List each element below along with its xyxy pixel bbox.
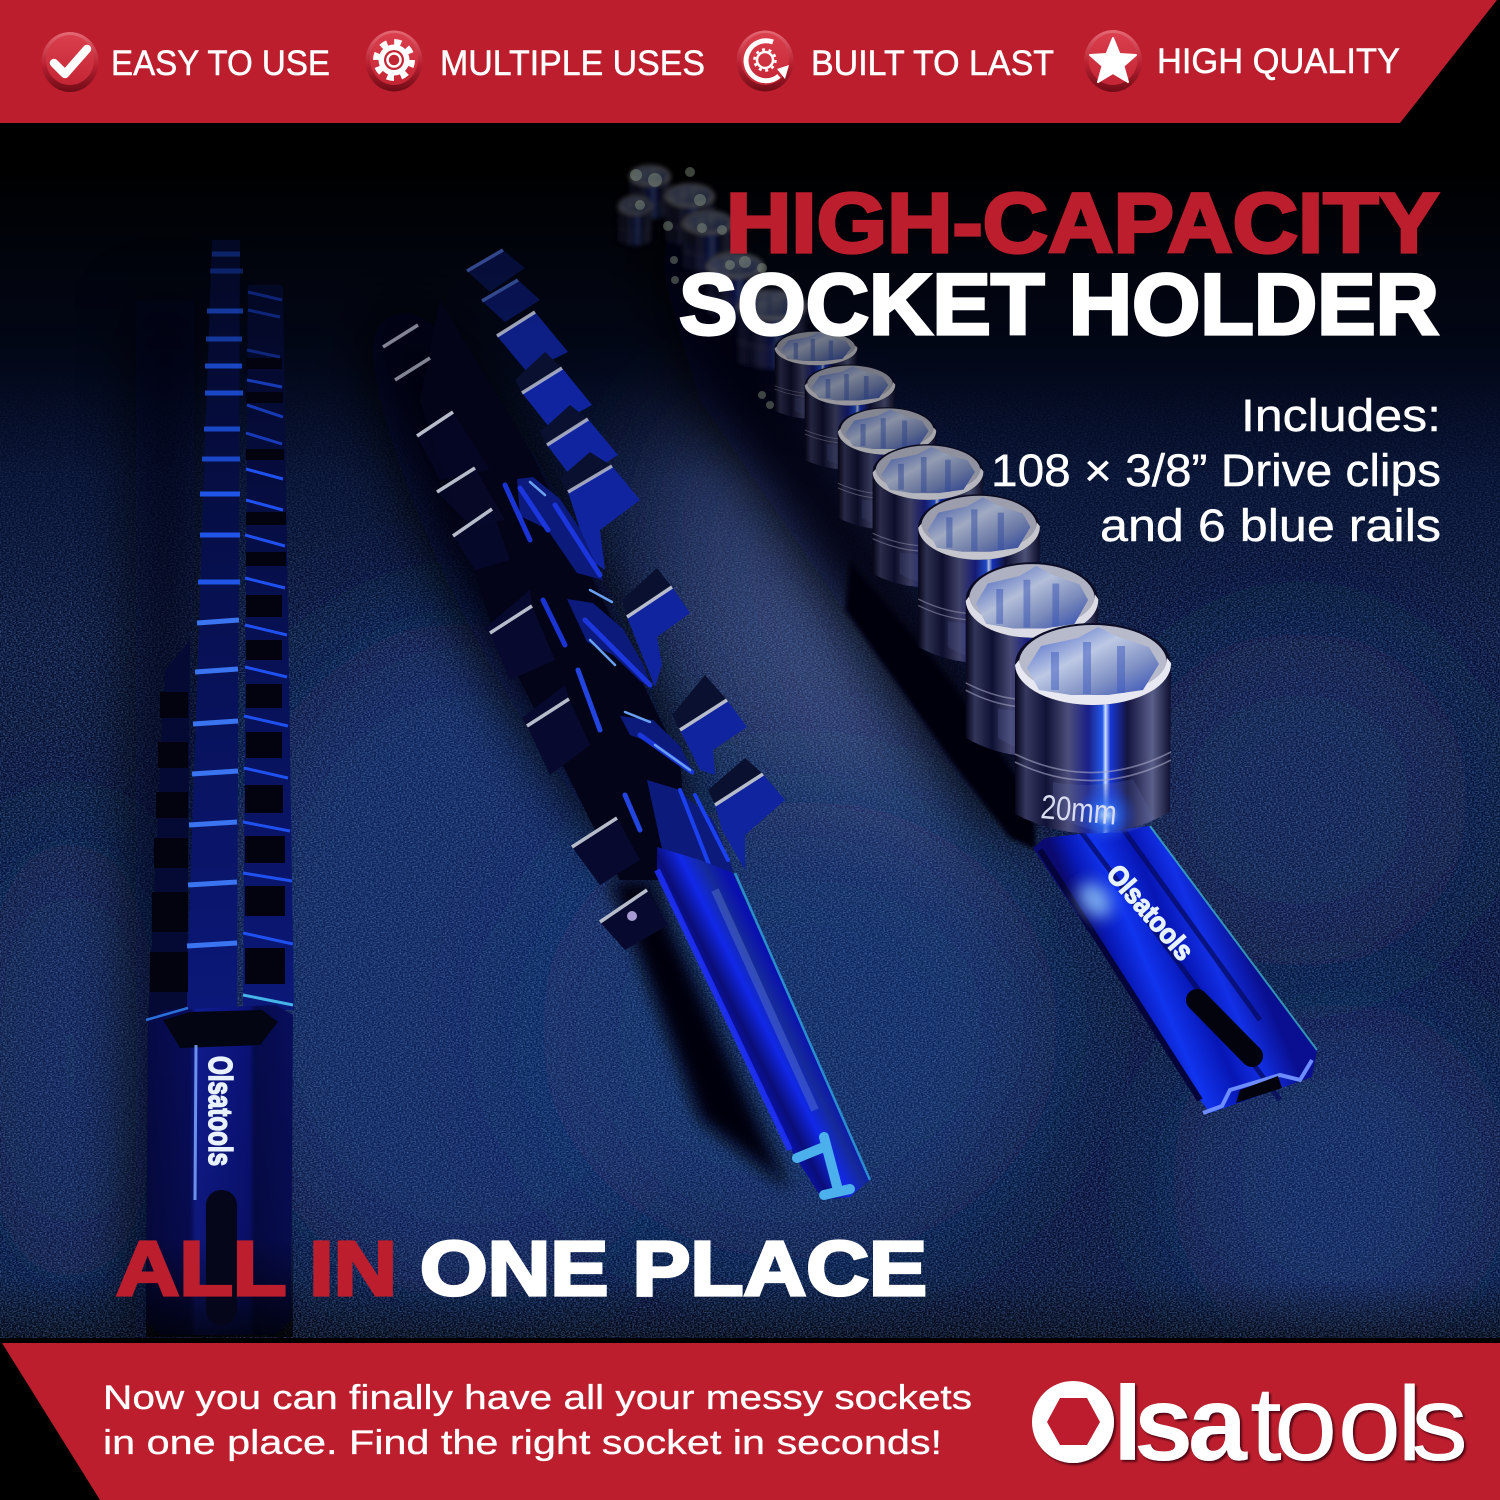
feature: multiple uses: MULTIPLE USES xyxy=(440,44,705,83)
text block: includes: Includes: xyxy=(1241,390,1441,441)
right column streaks xyxy=(243,292,293,1005)
socket 7 xyxy=(775,331,857,419)
centre rail right wings xyxy=(467,250,785,870)
socket 1 xyxy=(1015,623,1171,845)
right rail dark band under sockets xyxy=(845,560,1036,850)
top banner xyxy=(0,0,1500,130)
sockets in focus, largest last xyxy=(775,331,1171,845)
right column gaps xyxy=(245,358,286,984)
rail: right, holding sockets xyxy=(640,200,1317,1113)
feature: easy to use xyxy=(42,32,330,92)
left column gaps xyxy=(150,692,188,992)
left rail dark cap xyxy=(163,1010,278,1048)
socket 4 xyxy=(873,444,983,587)
photo background: dark blue fabric xyxy=(0,227,1500,1338)
sockets far away, out of focus xyxy=(618,164,830,409)
feature: easy to use: EASY TO USE xyxy=(111,44,330,83)
tagline: Now you can finally have all your messy sockets xyxy=(103,1379,972,1417)
logo: Olsatools: O xyxy=(1035,1376,1111,1470)
tagline xyxy=(103,1379,972,1462)
right rail blue tail xyxy=(1033,826,1317,1113)
left rail end plate xyxy=(146,1005,293,1335)
logo: Olsatools xyxy=(1032,1365,1468,1483)
feature: high quality xyxy=(1084,30,1400,92)
right rail slot xyxy=(1197,1000,1252,1056)
feature: high quality: HIGH QUALITY xyxy=(1157,42,1400,81)
centre rail spine xyxy=(420,300,690,880)
logo: Olsatools: lsa xyxy=(1113,1365,1248,1483)
size marking: 20mm xyxy=(1039,788,1118,833)
centre rail light streaks xyxy=(383,250,763,922)
left rail clip columns xyxy=(148,240,294,1020)
logo on right rail: Olsatools xyxy=(1100,859,1200,966)
heading: all in one place: ONE PLACE xyxy=(420,1226,927,1312)
centre rail clip bodies xyxy=(517,477,733,910)
icon: star xyxy=(1084,30,1142,92)
socket 5 xyxy=(838,407,936,529)
socket 2 xyxy=(966,562,1098,756)
centre rail cyan tip xyxy=(797,1137,850,1195)
feature: built to last: BUILT TO LAST xyxy=(811,44,1054,83)
feature: built to last xyxy=(736,30,1054,92)
heading: high-capacity socket holder xyxy=(679,176,1439,353)
centre rail blue strip xyxy=(657,847,870,1200)
rail: left, clips seen end-on xyxy=(135,240,294,1340)
icon: cycle arrow with gear xyxy=(736,30,794,92)
centre rail clip glints xyxy=(505,482,728,880)
centre rail left wings xyxy=(417,412,668,950)
center column streaks xyxy=(187,254,243,946)
heading: high-capacity socket holder: SOCKET HOLDER xyxy=(679,257,1439,353)
left rail slot xyxy=(206,1190,237,1325)
tagline: in one place. Find the right socket in seconds! xyxy=(103,1424,942,1462)
logo: Olsatools: tools xyxy=(1250,1365,1468,1483)
socket 6 xyxy=(805,364,895,470)
text block: includes: and 6 blue rails xyxy=(1100,500,1441,551)
logo on left rail: Olsatools xyxy=(202,1056,239,1166)
icon: gear xyxy=(366,30,422,92)
rail: centre, clips seen at an angle xyxy=(322,250,870,1200)
heading: all in one place xyxy=(116,1226,927,1312)
out-of-focus highlights xyxy=(630,167,830,409)
icon: check mark xyxy=(42,32,98,92)
text block: includes xyxy=(991,390,1441,551)
text block: includes: 108 × 3/8” Drive clips xyxy=(991,445,1441,496)
bottom banner xyxy=(0,1338,1500,1500)
centre rail right wing tops xyxy=(515,352,763,805)
heading: high-capacity socket holder: HIGH-CAPACITY xyxy=(726,176,1439,270)
feature: multiple uses xyxy=(366,30,705,92)
heading: all in one place: ALL IN xyxy=(116,1226,397,1312)
socket 3 xyxy=(918,494,1040,663)
